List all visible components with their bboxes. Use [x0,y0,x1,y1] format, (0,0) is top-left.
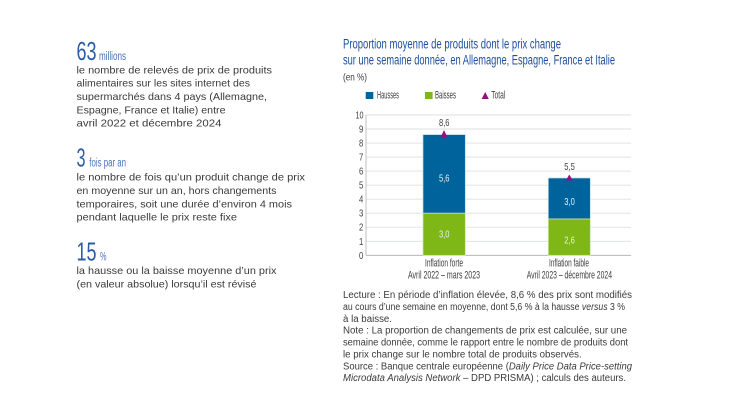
legend item: Hausses: Hausses [377,90,399,102]
y axis labels: 2 [359,222,363,234]
stat description: 63 millions: avril 2022 et décembre 2024 [76,118,222,130]
y axis labels: 8 [359,138,363,150]
stat number: 15 %: % [100,252,106,264]
stat description: 63 millions: le nombre de relevés de prix de produits [76,64,272,76]
bar: Inflation forte: 8,6 [439,117,450,129]
stat description: 63 millions: Espagne, France et Italie) entre [76,104,226,116]
stat number: 63 millions [76,38,126,66]
unit label: (en %) [343,73,367,84]
stat description: 63 millions: alimentaires sur les sites internet des [76,78,250,90]
stat block: 63 millions [76,38,272,130]
legend [366,90,505,102]
notes and source [343,290,632,384]
reading note: Lecture : En période d’inflation élevée, 8,6 % des prix sont modifiés [343,290,632,301]
reading note: au cours d’une semaine en moyenne, dont 5,6 % à la hausse versus 3 % [343,302,625,313]
chart title [343,36,615,68]
chart title: Proportion moyenne de produits dont le prix change [343,36,561,52]
stat number: 3 fois par an: fois par an [89,158,126,170]
stat description: 3 fois par an [76,172,306,224]
y axis labels: 7 [359,152,363,164]
bar: Inflation faible: 2,6 [564,234,575,246]
stat number: 63 millions: 63 [76,38,96,66]
bar: Inflation faible [548,161,590,255]
y axis labels: 3 [359,208,363,220]
bar: Inflation forte: 5,6 [439,172,450,184]
category label: Inflation faible: Inflation faible [549,258,589,270]
category label: Inflation faible [527,258,612,282]
stat description: 63 millions [76,64,272,130]
y axis labels: 4 [359,194,363,206]
chart title: sur une semaine donnée, en Allemagne, Espagne, France et Italie [343,52,615,68]
y axis labels: 1 [359,236,363,248]
y axis labels: 10 [356,110,364,122]
reading note: à la baisse. [343,314,392,325]
stat description: 3 fois par an: temporaires, soit une durée d’environ 4 mois [76,198,292,210]
stat description: 3 fois par an: le nombre de fois qu’un produit change de prix [76,172,306,184]
source: Source : Banque centrale européenne (Daily Price Data Price-setting [343,362,632,372]
stacked bar chart [356,110,631,282]
y axis labels: 0 [359,250,363,262]
category label: Inflation forte: Inflation forte [425,258,463,270]
legend item: Total: Total [491,90,505,102]
y axis labels: 9 [359,124,363,136]
legend item: Baisses: Baisses [435,90,456,102]
category label: Inflation forte [408,258,480,282]
category label: Inflation forte: Avril 2022 – mars 2023 [408,270,480,282]
reading note [343,290,632,325]
source: Microdata Analysis Network – DPD PRISMA) ; calculs des auteurs. [343,373,626,384]
source [343,362,632,384]
bar: Inflation forte: 3,0 [439,228,450,240]
y axis labels [356,110,364,262]
stat number: 3 fois par an: 3 [76,145,86,173]
method note: Note : La proportion de changements de prix est calculée, sur une [343,326,627,336]
stat description: 3 fois par an: pendant laquelle le prix reste fixe [76,212,237,224]
stat description: 15 %: (en valeur absolue) lorsqu’il est révisé [76,278,257,290]
method note: semaine donnée, comme le rapport entre le nombre de produits dont [343,338,628,348]
method note [343,326,628,360]
stat description: 15 % [76,265,277,290]
stat number: 3 fois par an [76,145,126,173]
bar: Inflation forte [423,117,465,255]
bar: Inflation faible: 5,5 [564,161,575,173]
stat block: 15 % [76,239,277,290]
stat number: 63 millions: millions [99,51,126,63]
bar: Inflation faible: 3,0 [564,196,575,208]
stat block: 3 fois par an [76,145,306,224]
method note: le prix change sur le nombre total de produits observés. [343,350,582,360]
stat description: 15 %: la hausse ou la baisse moyenne d’un prix [76,265,277,277]
stat description: 63 millions: supermarchés dans 4 pays (Allemagne, [76,91,267,103]
y axis labels: 5 [359,180,363,192]
stat number: 15 %: 15 [76,239,96,267]
category label: Inflation faible: Avril 2023 – décembre 2024 [527,270,612,282]
stat description: 3 fois par an: en moyenne sur un an, hors changements [76,185,276,197]
y axis labels: 6 [359,166,363,178]
